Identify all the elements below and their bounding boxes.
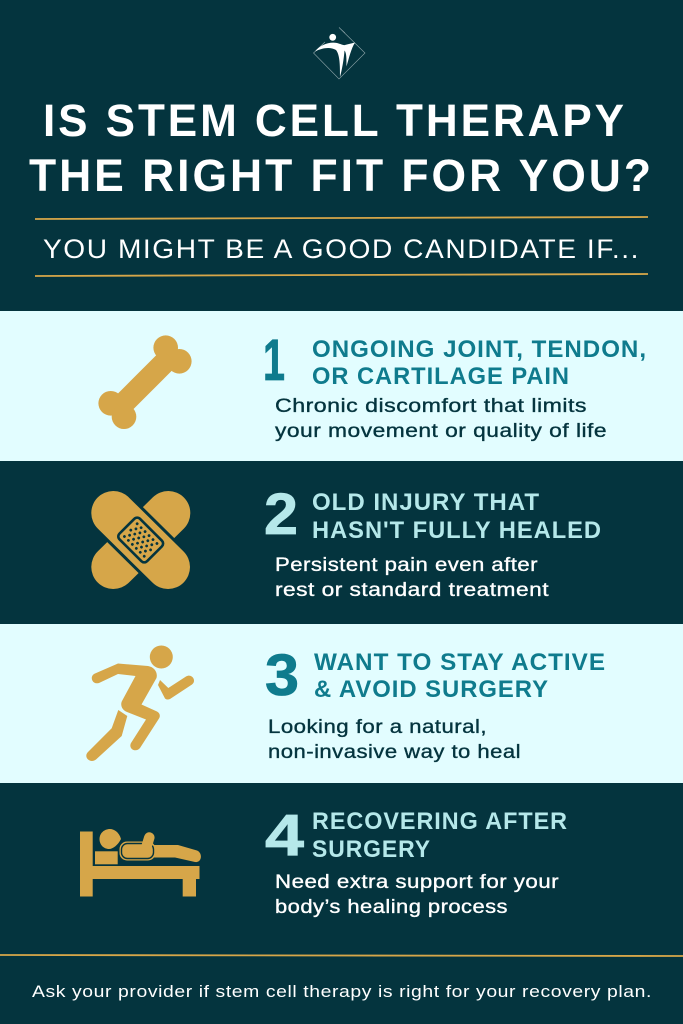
heading 4 bbox=[312, 808, 568, 863]
heading 4: SURGERY bbox=[312, 836, 431, 863]
description 1: your movement or quality of life bbox=[275, 420, 607, 442]
description 3 bbox=[268, 716, 521, 763]
subtitle: YOU MIGHT BE A GOOD CANDIDATE IF... bbox=[43, 234, 640, 264]
heading 1: OR CARTILAGE PAIN bbox=[312, 363, 570, 390]
panel: stay active bbox=[0, 624, 683, 783]
panel: ongoing joint pain bbox=[0, 311, 683, 461]
number 1: 1 bbox=[263, 328, 285, 393]
heading 4: RECOVERING AFTER bbox=[312, 808, 568, 835]
icon: runner bbox=[86, 646, 194, 761]
title: IS STEM CELL THERAPY bbox=[43, 95, 627, 146]
description 4 bbox=[275, 871, 559, 918]
heading 2: HASN'T FULLY HEALED bbox=[312, 517, 602, 544]
heading 3: WANT TO STAY ACTIVE bbox=[314, 649, 606, 676]
description 2: rest or standard treatment bbox=[275, 579, 549, 601]
panel: old injury bbox=[0, 461, 683, 624]
footer note: Ask your provider if stem cell therapy is right for your recovery plan. bbox=[32, 983, 652, 1001]
icon: bone bbox=[98, 335, 192, 429]
heading 1 bbox=[312, 336, 647, 390]
logo bbox=[314, 28, 365, 79]
number 4: 4 bbox=[265, 803, 304, 868]
number 2: 2 bbox=[264, 482, 298, 547]
number 3: 3 bbox=[265, 643, 299, 708]
description 3: non-invasive way to heal bbox=[268, 741, 521, 763]
description 1: Chronic discomfort that limits bbox=[275, 395, 587, 417]
icon: crossed bandages bbox=[113, 513, 168, 567]
description 4: Need extra support for your bbox=[275, 871, 559, 893]
icon: patient in bed bbox=[80, 829, 201, 896]
heading 3 bbox=[314, 649, 606, 703]
description 3: Looking for a natural, bbox=[268, 716, 487, 738]
title: THE RIGHT FIT FOR YOU? bbox=[29, 150, 654, 201]
heading 2 bbox=[312, 489, 602, 544]
title bbox=[29, 95, 654, 201]
heading 3: & AVOID SURGERY bbox=[314, 676, 549, 703]
description 2: Persistent pain even after bbox=[275, 554, 538, 576]
panel: recovering after surgery bbox=[0, 783, 683, 955]
description 4: body’s healing process bbox=[275, 896, 508, 918]
heading 1: ONGOING JOINT, TENDON, bbox=[312, 336, 647, 363]
description 1 bbox=[275, 395, 607, 442]
description 2 bbox=[275, 554, 549, 601]
heading 2: OLD INJURY THAT bbox=[312, 489, 540, 516]
